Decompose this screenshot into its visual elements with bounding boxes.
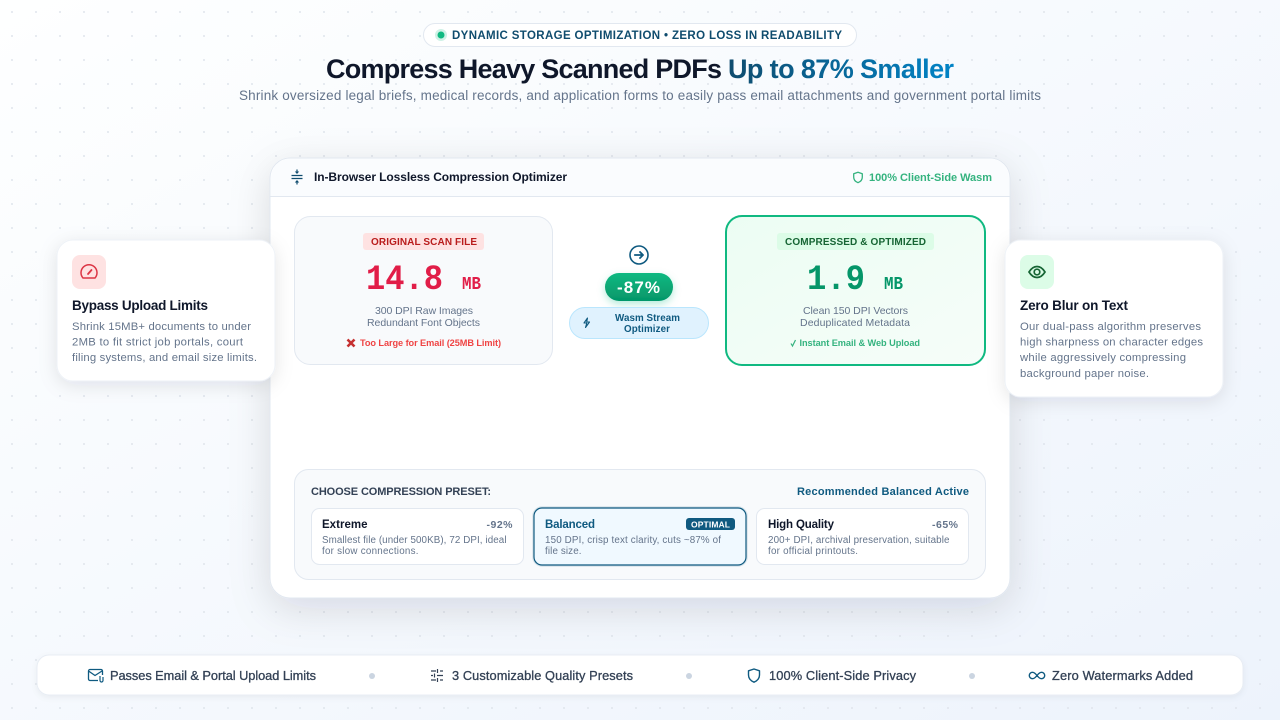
footer feature bar bbox=[37, 655, 1243, 695]
preset: balanced: OPTIMAL bbox=[691, 520, 730, 530]
panel: original file: ORIGINAL SCAN FILE bbox=[371, 237, 477, 248]
icon: gauge bbox=[72, 255, 106, 289]
panel: zero blur on text: background paper noise. bbox=[1020, 368, 1149, 380]
icon: eye bbox=[1020, 255, 1054, 289]
success: Instant Email & Web Upload bbox=[800, 338, 920, 348]
preset: high quality: for official printouts. bbox=[768, 546, 858, 557]
header title: In-Browser Lossless Compression Optimizer bbox=[314, 170, 567, 184]
panel: compressed file: Clean 150 DPI Vectors bbox=[803, 305, 908, 317]
panel: compressed file bbox=[726, 216, 985, 365]
presets heading: CHOOSE COMPRESSION PRESET: bbox=[311, 486, 491, 498]
panel: zero blur on text: Zero Blur on Text bbox=[1020, 298, 1128, 313]
panel: bypass upload limits: filing systems, and email size limits. bbox=[72, 352, 257, 364]
panel: zero blur on text: high sharpness on character edges bbox=[1020, 336, 1203, 348]
panel: original file: Redundant Font Objects bbox=[367, 317, 480, 329]
feature: watermarks: Zero Watermarks Added bbox=[1052, 668, 1193, 683]
preset: extreme: Extreme bbox=[322, 519, 368, 531]
panel: compressed file: Deduplicated Metadata bbox=[800, 317, 910, 329]
preset: high quality: -65% bbox=[932, 519, 959, 531]
client-side badge: 100% Client-Side Wasm bbox=[869, 172, 992, 184]
title: Up to 87% Smaller bbox=[728, 54, 954, 84]
feature: upload limits: Passes Email & Portal Upload Limits bbox=[110, 668, 316, 683]
panel: bypass upload limits: 2MB to fit strict job portals, court bbox=[72, 336, 244, 348]
panel: presets bbox=[294, 470, 986, 580]
preset: balanced: file size. bbox=[545, 546, 582, 557]
panel: original file bbox=[294, 216, 552, 364]
panel: main optimizer card bbox=[270, 158, 1010, 598]
preset: extreme: Smallest file (under 500KB), 72 DPI, ideal bbox=[322, 535, 506, 546]
panel: zero blur on text: Our dual-pass algorithm preserves bbox=[1020, 321, 1201, 333]
file size: MB bbox=[462, 275, 481, 295]
panel: original file: 300 DPI Raw Images bbox=[375, 305, 473, 317]
panel: bypass upload limits: Bypass Upload Limits bbox=[72, 298, 208, 313]
wasm pill: Wasm Stream bbox=[615, 313, 680, 324]
reduction badge: -87% bbox=[617, 278, 660, 297]
warning: Too Large for Email (25MB Limit) bbox=[360, 338, 501, 348]
subtitle: Shrink oversized legal briefs, medical records, and application forms to easily pass email attachments and government portal limits bbox=[239, 88, 1041, 103]
preset: high quality: 200+ DPI, archival preservation, suitable bbox=[768, 535, 950, 546]
icon: compress bbox=[292, 170, 302, 184]
preset: balanced bbox=[534, 508, 746, 565]
file size: 14.8 bbox=[366, 260, 443, 300]
preset: balanced: Balanced bbox=[545, 519, 595, 531]
panel: compressed file: COMPRESSED & OPTIMIZED bbox=[785, 237, 926, 248]
card header bbox=[270, 158, 1010, 196]
file size bbox=[807, 260, 903, 300]
panel: bypass upload limits bbox=[57, 240, 275, 381]
title: Compress Heavy Scanned PDFs bbox=[326, 54, 722, 84]
recommended label: Recommended Balanced Active bbox=[797, 486, 969, 498]
preset: high quality bbox=[756, 508, 968, 564]
title bbox=[326, 54, 954, 84]
preset: extreme: for slow connections. bbox=[322, 546, 418, 557]
preset: high quality: High Quality bbox=[768, 519, 835, 531]
status pill: DYNAMIC STORAGE OPTIMIZATION • ZERO LOSS IN READABILITY bbox=[452, 30, 842, 42]
icon: arrow bbox=[630, 246, 648, 264]
wasm pill: Optimizer bbox=[624, 324, 670, 335]
file size: MB bbox=[884, 275, 903, 295]
wasm pill bbox=[570, 308, 708, 338]
panel: zero blur on text: while aggressively compressing bbox=[1019, 352, 1186, 364]
panel: zero blur on text bbox=[1005, 240, 1223, 397]
status pill bbox=[424, 24, 856, 46]
preset: extreme bbox=[312, 508, 524, 564]
preset: balanced: 150 DPI, crisp text clarity, cuts ~87% of bbox=[545, 535, 721, 546]
feature: presets: 3 Customizable Quality Presets bbox=[452, 668, 633, 683]
panel: bypass upload limits: Shrink 15MB+ documents to under bbox=[72, 321, 251, 333]
reduction badge bbox=[605, 273, 673, 301]
feature: privacy: 100% Client-Side Privacy bbox=[769, 668, 917, 683]
file size: 1.9 bbox=[807, 260, 865, 300]
preset: extreme: -92% bbox=[486, 519, 513, 531]
